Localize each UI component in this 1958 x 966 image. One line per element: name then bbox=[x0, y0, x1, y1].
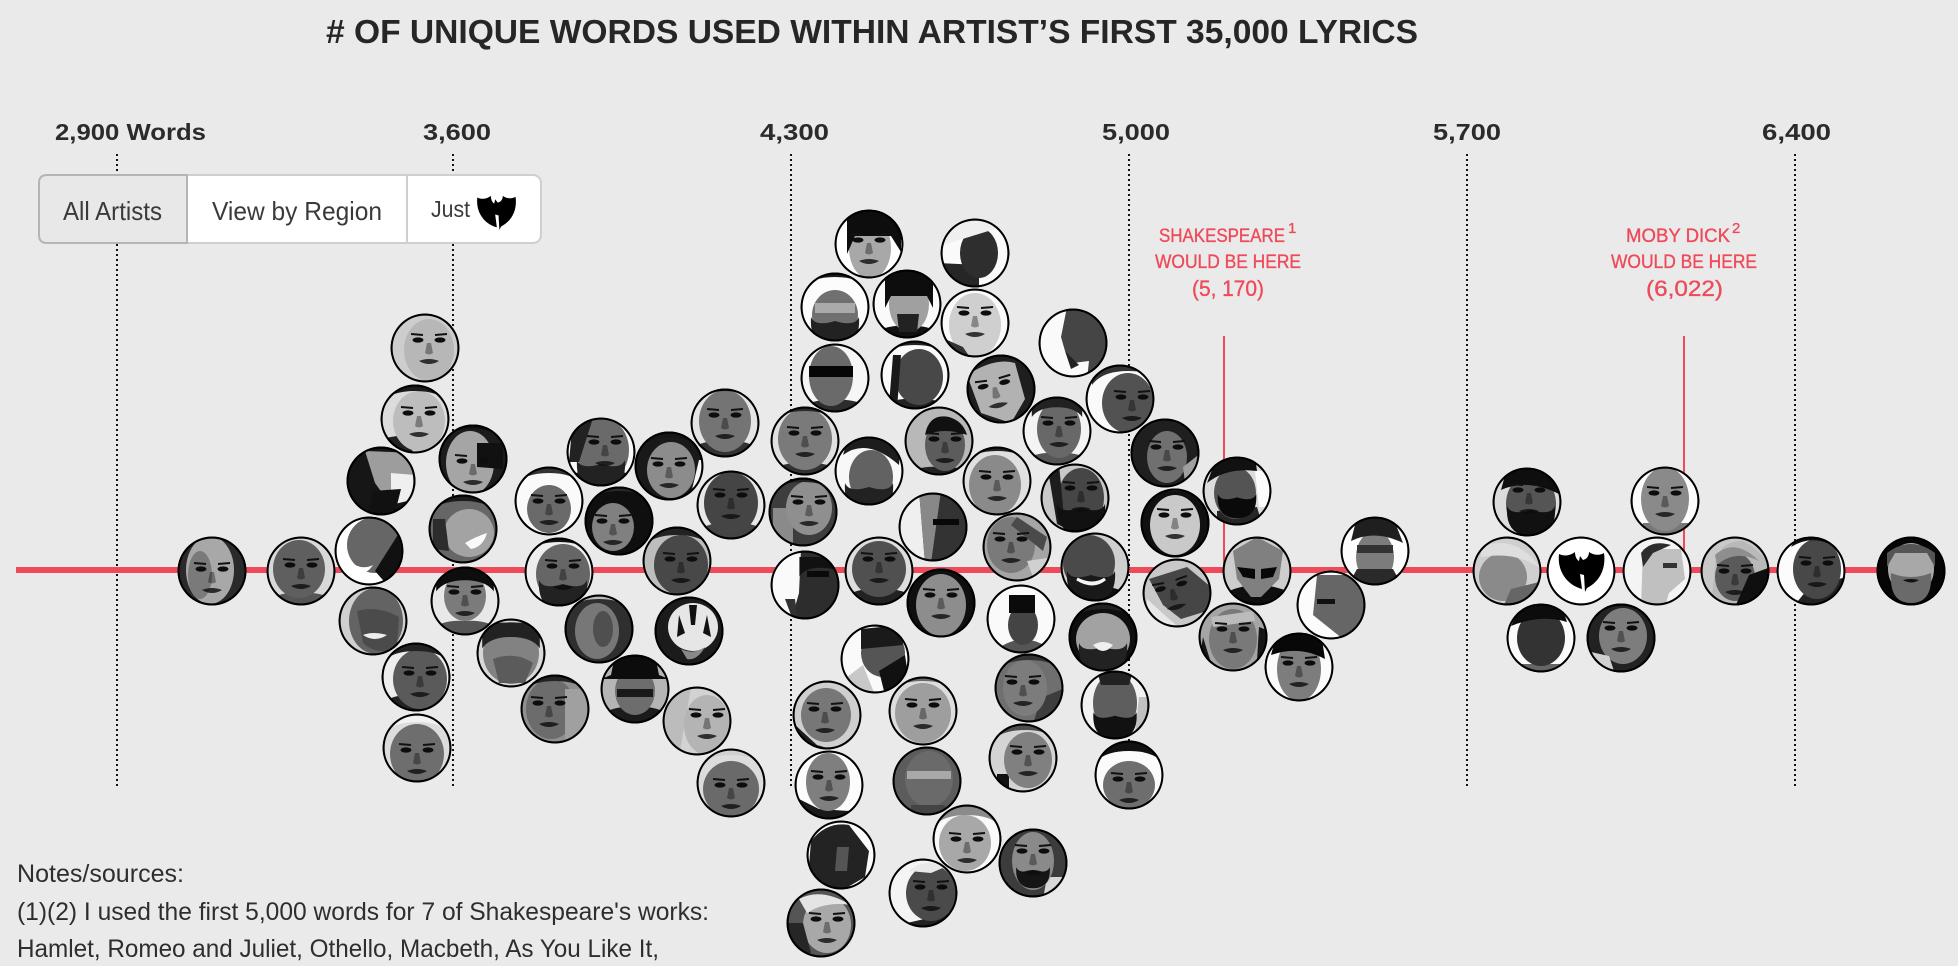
artist portrait 39 bbox=[899, 406, 979, 489]
artist portrait 23 bbox=[654, 596, 724, 666]
artist portrait 2 bbox=[266, 536, 336, 606]
artist portrait 71 bbox=[1222, 536, 1292, 607]
button: All Artists: All Artists bbox=[63, 196, 162, 226]
artist portrait 22 bbox=[642, 526, 712, 596]
artist portrait 17 bbox=[564, 594, 634, 664]
notes and sources: Notes/sources: bbox=[17, 860, 184, 888]
artist portrait 52 bbox=[839, 624, 911, 695]
artist portrait 62 bbox=[806, 820, 876, 891]
notes and sources: Hamlet, Romeo and Juliet, Othello, Macbeth, As You Like It, bbox=[17, 935, 659, 963]
axis tick labels: 5,700 bbox=[1433, 119, 1501, 145]
artist portrait 57 bbox=[1080, 670, 1151, 740]
notes and sources bbox=[17, 860, 709, 963]
artist portrait 51 bbox=[1055, 532, 1135, 609]
artist portrait 19 bbox=[584, 486, 654, 556]
artist portrait 26 bbox=[696, 470, 766, 540]
artist portrait 16 bbox=[524, 538, 594, 606]
beeswarm of artist portraits bbox=[177, 209, 1946, 958]
axis tick labels: 2,900 Words bbox=[55, 119, 206, 145]
callout: Moby Dick: (6,022) bbox=[1646, 276, 1723, 301]
artist portrait 53 bbox=[791, 663, 863, 751]
artist portrait 42 bbox=[961, 433, 1033, 516]
artist portrait 73 bbox=[1264, 632, 1334, 702]
view toggle buttons bbox=[39, 175, 541, 243]
title: # OF UNIQUE WORDS USED WITHIN ARTIST’S FIRST 35,000 LYRICS bbox=[326, 13, 1418, 50]
artist portrait 28 bbox=[768, 478, 838, 546]
axis tick labels: 4,300 bbox=[760, 119, 829, 145]
callout: Moby Dick: 2 bbox=[1732, 220, 1740, 237]
callout: Moby Dick bbox=[1611, 220, 1757, 301]
artist portrait 24 bbox=[661, 686, 732, 757]
artist portrait 36 bbox=[940, 288, 1010, 359]
artist portrait 75 bbox=[1340, 516, 1410, 587]
callout: Shakespeare bbox=[1155, 220, 1301, 301]
Shakespeare marker line bbox=[1223, 336, 1225, 568]
button: All Artists bbox=[39, 175, 187, 243]
artist portrait 15 bbox=[514, 466, 584, 536]
artist portrait 66 bbox=[998, 828, 1069, 899]
artist portrait 5 bbox=[382, 642, 450, 712]
callout: Shakespeare: 1 bbox=[1288, 220, 1296, 237]
artist portrait 12 bbox=[380, 384, 450, 454]
artist portrait 72 bbox=[1198, 602, 1269, 672]
button: Just W logo bbox=[431, 196, 516, 230]
artist portrait 65 bbox=[931, 797, 1003, 874]
artist portrait 1 bbox=[177, 536, 247, 606]
button: View by Region: View by Region bbox=[212, 196, 382, 226]
artist portrait 11 bbox=[346, 446, 416, 516]
artist portrait 21 bbox=[634, 432, 704, 500]
artist portrait 25 bbox=[690, 388, 760, 458]
artist portrait 77 bbox=[1472, 536, 1543, 607]
artist portrait 74 bbox=[1296, 570, 1367, 640]
artist portrait 7 bbox=[438, 424, 508, 494]
artist portrait 31 bbox=[800, 272, 870, 342]
artist portrait 33 bbox=[834, 209, 904, 279]
axis tick labels: 5,000 bbox=[1102, 119, 1170, 145]
callout: Shakespeare: WOULD BE HERE bbox=[1155, 252, 1301, 273]
artist portrait 37 bbox=[880, 340, 950, 410]
artist portrait 35 bbox=[939, 217, 1010, 289]
artist portrait 3 bbox=[334, 516, 405, 587]
Moby Dick marker line bbox=[1683, 336, 1685, 568]
artist portrait 55 bbox=[993, 642, 1065, 724]
artist portrait 14 bbox=[520, 674, 590, 744]
artist portrait 9 bbox=[476, 618, 546, 688]
artist portrait 43 bbox=[1017, 395, 1097, 475]
artist portrait 18 bbox=[566, 418, 636, 486]
artist portrait 56 bbox=[1067, 591, 1139, 673]
artist portrait 48 bbox=[839, 536, 919, 611]
artist portrait 80 bbox=[1585, 588, 1657, 674]
artist portrait 81 bbox=[1630, 466, 1700, 537]
artist portrait 10 bbox=[428, 494, 498, 564]
artist portrait 68 bbox=[1139, 473, 1211, 558]
callout: Shakespeare: SHAKESPEARE bbox=[1159, 226, 1285, 247]
artist portrait 29 bbox=[770, 406, 840, 476]
artist portrait 54 bbox=[887, 663, 959, 746]
artist portrait 67 bbox=[1130, 418, 1201, 488]
artist portrait 64 bbox=[888, 858, 959, 929]
artist portrait 63 bbox=[786, 888, 856, 958]
artist portrait 58 bbox=[1089, 733, 1169, 823]
artist portrait 20 bbox=[600, 654, 670, 724]
artist portrait 60 bbox=[892, 746, 962, 817]
artist portrait 46 bbox=[1040, 463, 1110, 534]
artist portrait 59 bbox=[988, 712, 1061, 793]
notes and sources: (1)(2) I used the first 5,000 words for 7 of Shakespeare's works: bbox=[17, 898, 709, 926]
axis tick labels bbox=[55, 119, 1831, 145]
artist portrait 83 bbox=[1699, 535, 1771, 607]
artist portrait 27 bbox=[696, 748, 766, 818]
icon: W logo portrait bbox=[1546, 536, 1616, 606]
callout: Moby Dick: MOBY DICK bbox=[1626, 226, 1730, 247]
callout: Shakespeare: (5, 170) bbox=[1192, 276, 1264, 301]
artist portrait 79 bbox=[1506, 603, 1576, 674]
artist portrait 85 bbox=[1876, 536, 1946, 606]
artist portrait 69 bbox=[1142, 558, 1212, 629]
artist portrait 45 bbox=[1085, 353, 1164, 434]
artist portrait 70 bbox=[1202, 456, 1273, 527]
artist portrait 40 bbox=[829, 435, 909, 517]
artist portrait 44 bbox=[1038, 307, 1109, 379]
artist portrait 32 bbox=[800, 344, 870, 412]
axis tick labels: 3,600 bbox=[423, 119, 491, 145]
artist portrait 4 bbox=[338, 586, 408, 656]
axis line bbox=[16, 567, 1906, 573]
artist portrait 50 bbox=[986, 584, 1056, 655]
artist portrait 13 bbox=[390, 313, 460, 383]
artist portrait 76 bbox=[1492, 467, 1562, 537]
artist portrait 84 bbox=[1776, 536, 1847, 607]
artist portrait 38 bbox=[966, 354, 1036, 424]
axis tick labels: 6,400 bbox=[1762, 119, 1831, 145]
button: Just W logo: Just bbox=[431, 196, 471, 222]
artist portrait 30 bbox=[770, 549, 843, 621]
artist portrait 47 bbox=[982, 512, 1053, 582]
artist portrait 6 bbox=[382, 714, 452, 782]
callout: Moby Dick: WOULD BE HERE bbox=[1611, 252, 1757, 273]
artist portrait 82 bbox=[1622, 536, 1692, 607]
artist portrait 8 bbox=[430, 566, 500, 636]
artist portrait 41 bbox=[898, 491, 969, 563]
artist portrait 34 bbox=[872, 270, 942, 338]
artist portrait 49 bbox=[905, 555, 977, 638]
artist portrait 61 bbox=[794, 750, 864, 821]
